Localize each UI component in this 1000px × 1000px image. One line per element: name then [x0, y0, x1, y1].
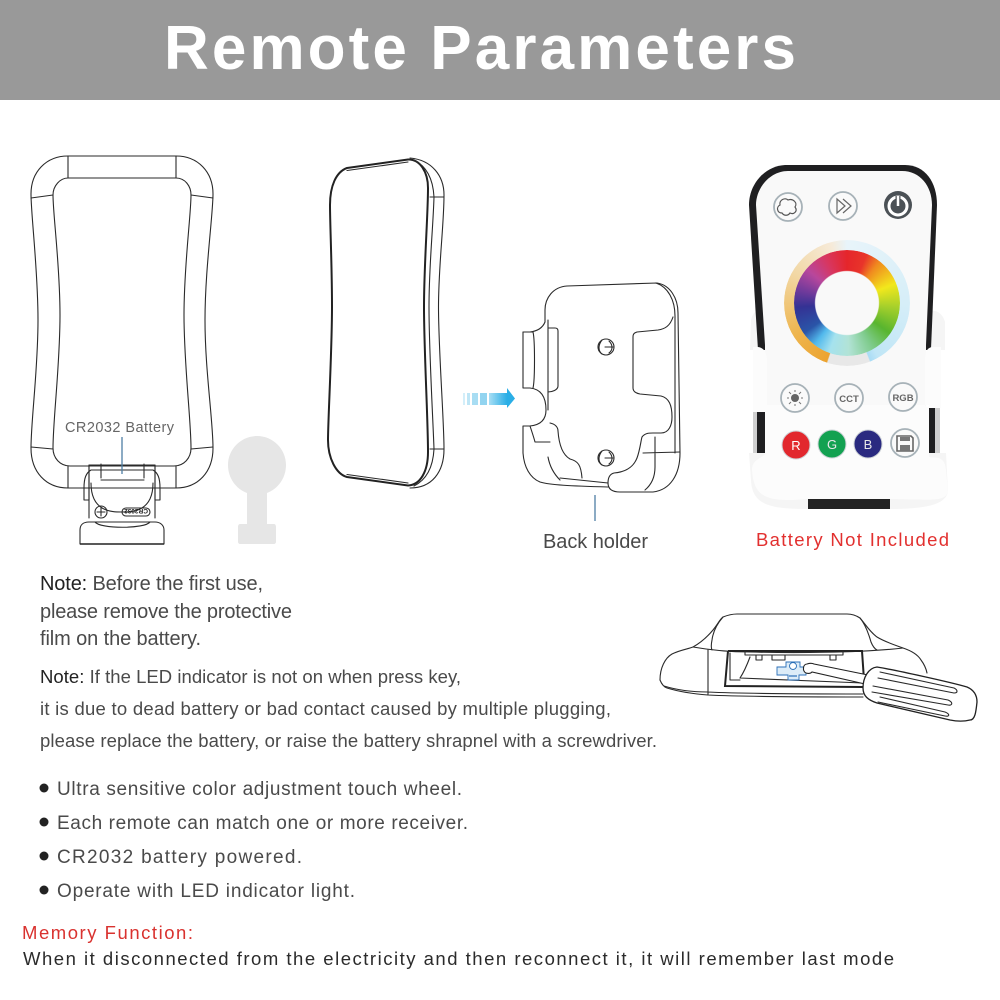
feature list: Operate with LED indicator light. — [57, 881, 355, 902]
screwdriver — [803, 663, 977, 721]
note: protective film: please remove the protective — [40, 601, 292, 623]
illustration: opening battery with screwdriver — [660, 614, 977, 721]
label: Back holder: Back holder — [543, 531, 648, 553]
illustration: remote back with battery — [31, 156, 213, 544]
color wheel — [784, 240, 910, 366]
button: RGB — [889, 383, 917, 411]
remote frame — [749, 165, 937, 350]
illustration: back holder — [523, 283, 680, 492]
feature list: CR2032 battery powered. — [57, 847, 302, 868]
illustration: front cover side view — [328, 158, 444, 488]
memory function heading: Memory Function: — [22, 922, 193, 943]
button: RGB: RGB — [892, 393, 914, 404]
label: CR2032 Battery: CR2032 Battery — [65, 420, 175, 436]
battery compartment — [80, 464, 164, 544]
note: protective film — [40, 573, 292, 650]
button: R — [782, 431, 810, 459]
note: protective film: Note: Before the first use, — [40, 573, 263, 595]
button: power — [884, 191, 912, 219]
button: G — [818, 430, 846, 458]
button: G: G — [827, 437, 837, 452]
button: scene — [774, 193, 802, 221]
arrow — [463, 388, 515, 408]
button: R: R — [791, 438, 801, 453]
button: next — [829, 192, 857, 220]
button: brightness — [781, 384, 809, 412]
bottom slot — [808, 499, 890, 509]
note: LED indicator: Note: If the LED indicator is not on when press key, — [40, 666, 461, 687]
header band — [0, 0, 1000, 100]
note: LED indicator: it is due to dead battery or bad contact caused by multiple plugging, — [40, 698, 611, 719]
holder clip — [752, 347, 948, 500]
holder arms behind — [749, 311, 948, 509]
title: Remote Parameters — [164, 14, 796, 83]
icon: protective film tab — [228, 436, 286, 544]
memory function text: When it disconnected from the electricity and then reconnect it, it will remember last mode — [23, 948, 894, 969]
button: B: B — [864, 437, 872, 452]
feature list: Each remote can match one or more receiver. — [57, 813, 468, 834]
battery compartment: CR2032 — [124, 507, 148, 514]
button: save — [891, 429, 919, 457]
pointer — [121, 437, 123, 474]
battery contact — [777, 662, 806, 680]
feature list — [40, 779, 468, 902]
button: B — [854, 430, 882, 458]
battery slot slivers — [756, 408, 937, 453]
note: LED indicator: please replace the battery, or raise the battery shrapnel with a screwdriver. — [40, 730, 657, 751]
note: protective film: film on the battery. — [40, 628, 201, 650]
photo: remote control — [749, 165, 948, 509]
label: battery warning: Battery Not Included — [756, 529, 949, 550]
note: LED indicator — [40, 666, 657, 751]
pointer — [594, 495, 596, 521]
feature list: Ultra sensitive color adjustment touch wheel. — [57, 779, 462, 800]
button: CCT: CCT — [839, 394, 859, 405]
remote face — [756, 171, 932, 410]
button: CCT — [835, 384, 863, 412]
